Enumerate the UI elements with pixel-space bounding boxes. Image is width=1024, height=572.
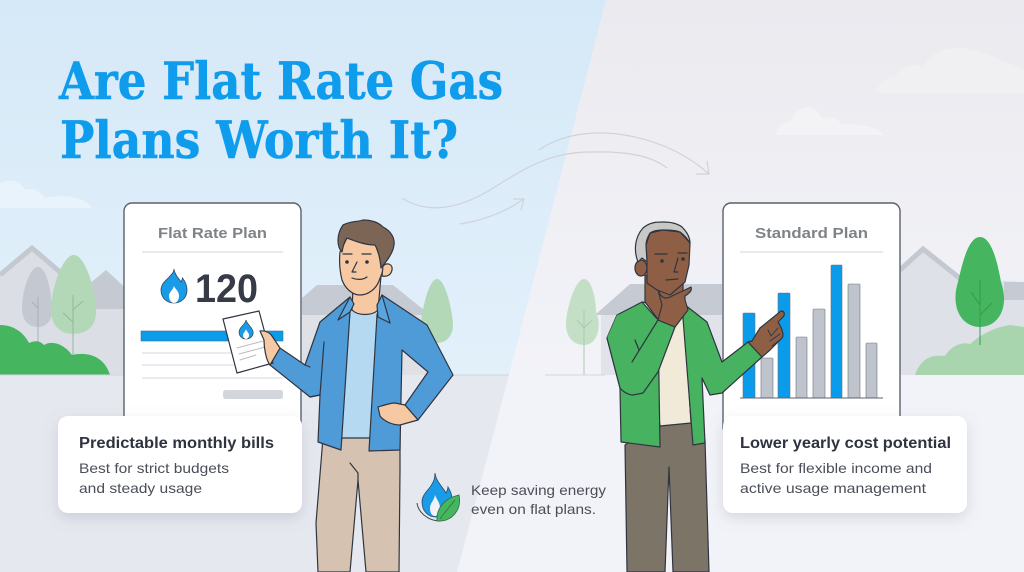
callout: lower yearly cost potential (723, 416, 967, 513)
progress bar (141, 331, 283, 341)
ear (635, 260, 647, 276)
right background scene: houses, trees and bush (545, 237, 1024, 375)
panel: flat rate plan card (124, 203, 301, 435)
collar (338, 295, 390, 323)
callout: predictable monthly bills: and steady usage (79, 480, 202, 496)
callout: lower yearly cost potential: Best for flexible income and (740, 460, 932, 476)
background: left blue sky and grey ground (0, 0, 606, 572)
trousers (316, 437, 400, 572)
raised sleeve (607, 310, 675, 395)
left background scene: houses, trees and bush (0, 246, 509, 375)
face (646, 230, 690, 295)
title (58, 52, 503, 171)
hair (338, 220, 394, 268)
card heading: Standard Plan (755, 225, 868, 242)
callout: predictable monthly bills: Best for strict budgets (79, 460, 229, 476)
neck (645, 275, 683, 322)
callout: predictable monthly bills (58, 416, 302, 513)
face (340, 238, 384, 295)
text: energy saving note (471, 482, 606, 517)
face details (345, 260, 349, 264)
arrow: upper curved arrow to standard plan (539, 133, 709, 174)
icon: flame with leaf (417, 473, 460, 521)
callout: lower yearly cost potential: Lower yearly cost potential (740, 435, 951, 452)
hand (260, 331, 280, 365)
shirt (642, 302, 691, 426)
callout: predictable monthly bills: Predictable monthly bills (79, 435, 274, 452)
card heading: Flat Rate Plan (158, 225, 267, 242)
cardigan left panel (607, 302, 660, 447)
ear (382, 264, 392, 276)
hand on chin (658, 287, 691, 327)
panel: standard plan card (723, 203, 900, 435)
callout: lower yearly cost potential: active usage management (740, 480, 926, 496)
title: Are Flat Rate Gas (58, 52, 503, 112)
amount: 120 (195, 267, 258, 311)
person: man with flat rate bill (223, 220, 453, 572)
bar chart (740, 265, 883, 398)
jacket left fold line (305, 342, 324, 397)
clouds (0, 48, 1024, 208)
text: energy saving note: even on flat plans. (471, 501, 596, 517)
title: Plans Worth It? (60, 111, 458, 171)
neck (352, 276, 381, 314)
icon: flame (161, 269, 187, 303)
face details (660, 259, 664, 263)
bill with flame (223, 311, 273, 373)
arrow: lower curved arrow (460, 199, 524, 224)
pointing hand (748, 311, 784, 357)
hand on hip (378, 403, 418, 425)
person: older man pointing at chart (607, 222, 784, 572)
arrow: swoosh line (402, 152, 667, 208)
cardigan right panel and sleeve (683, 305, 762, 445)
jacket left panel and sleeve (270, 297, 350, 450)
jacket right panel and sleeve (369, 295, 453, 451)
trousers (625, 420, 709, 572)
text: energy saving note: Keep saving energy (471, 482, 606, 498)
hair (635, 222, 690, 262)
t-shirt (341, 310, 378, 438)
